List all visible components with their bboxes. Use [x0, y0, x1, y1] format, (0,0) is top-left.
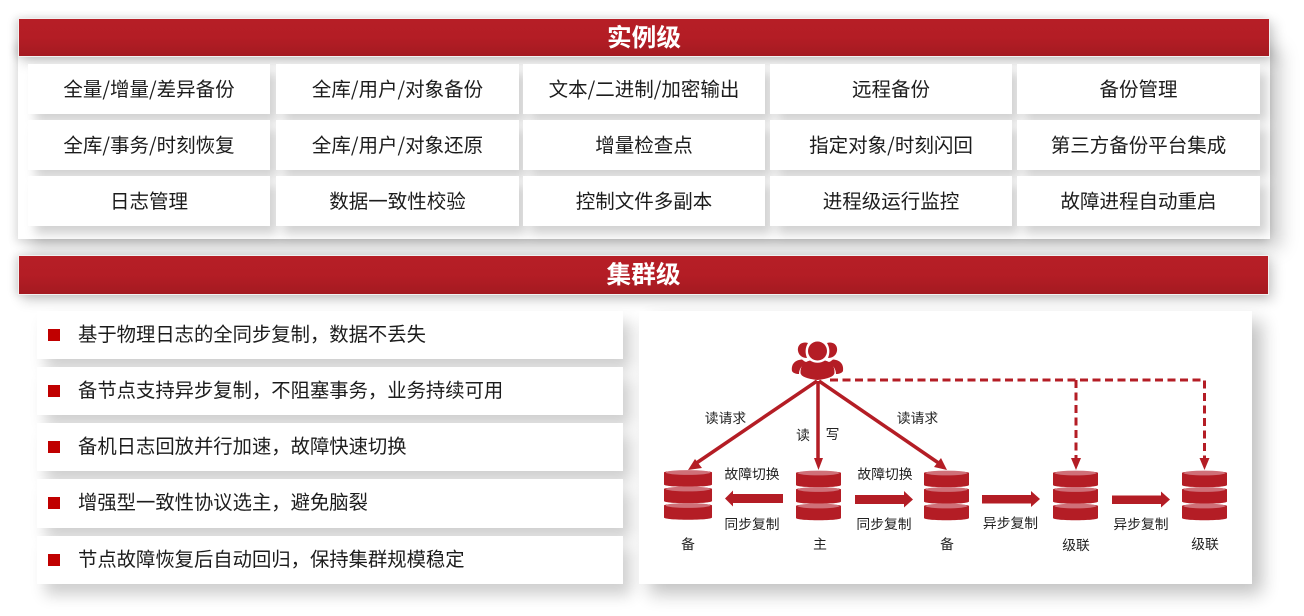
cell: 远程备份: [852, 73, 930, 102]
cell: [1017, 120, 1260, 170]
cell: [523, 64, 765, 114]
list item: 备节点支持异步复制，不阻塞事务，业务持续可用: [78, 381, 503, 402]
labels: diagram text: 读请求: [897, 411, 938, 426]
list item: [37, 367, 623, 415]
icon: users: [792, 342, 843, 380]
cell: [1017, 176, 1260, 226]
arrow: left failover: [725, 490, 783, 506]
labels: diagram text: 读请求: [705, 411, 746, 426]
list item: [37, 311, 623, 359]
icon: cascade database one: [1053, 471, 1098, 520]
cell: [523, 120, 765, 170]
cell: 备份管理: [1099, 73, 1178, 102]
cell: 全库/事务/时刻恢复: [63, 129, 235, 158]
list item: 备机日志回放并行加速，故障快速切换: [78, 437, 407, 458]
cell: [276, 64, 519, 114]
heading: cluster level: 集群级: [606, 262, 681, 289]
arrowhead: cascade one: [1071, 458, 1081, 470]
list item: [37, 423, 623, 471]
arrow: async replication one: [982, 491, 1040, 507]
cell: 进程级运行监控: [823, 185, 959, 214]
labels: diagram text: 同步复制: [856, 516, 912, 532]
heading: cluster level: [18, 255, 1269, 295]
arrow: read request to left standby: [688, 381, 817, 470]
labels: diagram text: [681, 411, 1219, 553]
arrow: dashed read to cascades: [830, 380, 1204, 460]
grid: instance level capabilities: [28, 64, 1271, 238]
cell: 指定对象/时刻闪回: [809, 129, 973, 158]
cell: [1017, 64, 1260, 114]
labels: diagram text: 主: [813, 537, 827, 552]
cell: 全库/用户/对象还原: [312, 129, 483, 158]
cell: 文本/二进制/加密输出: [549, 73, 739, 102]
heading: instance level: [18, 18, 1270, 57]
cell: 增量检查点: [595, 129, 693, 158]
labels: diagram text: 故障切换: [724, 466, 780, 482]
labels: diagram text: 备: [681, 536, 695, 552]
cell: 全量/增量/差异备份: [63, 73, 235, 102]
list item: [37, 479, 623, 528]
cell: 日志管理: [110, 185, 188, 214]
labels: diagram text: 异步复制: [983, 515, 1038, 531]
arrow: read request to right standby: [819, 381, 947, 470]
cell: 全库/用户/对象备份: [312, 73, 483, 102]
cell: [28, 120, 270, 170]
panel: instance level background: [18, 40, 1270, 239]
labels: diagram text: 级联: [1191, 537, 1219, 552]
cell: [770, 176, 1012, 226]
cell: [770, 120, 1012, 170]
labels: diagram text: 异步复制: [1113, 516, 1169, 532]
labels: diagram text: 读: [796, 428, 810, 443]
arrow: async replication two: [1112, 492, 1170, 508]
icon: cascade database two: [1182, 471, 1227, 520]
list: cluster level features: [38, 316, 638, 602]
cell: [28, 64, 270, 114]
labels: diagram text: 同步复制: [724, 516, 780, 532]
cell: 控制文件多副本: [576, 185, 712, 214]
arrowhead: cascade two: [1200, 458, 1210, 470]
icon: left standby db: [664, 470, 712, 520]
labels: diagram text: 备: [940, 536, 954, 552]
cell: 故障进程自动重启: [1060, 185, 1216, 214]
cell: [28, 176, 270, 226]
list item: 增强型一致性协议选主，避免脑裂: [78, 493, 368, 514]
cell: 第三方备份平台集成: [1051, 129, 1226, 158]
cell: [276, 120, 519, 170]
icon: right standby database: [924, 471, 969, 520]
labels: diagram text: 级联: [1062, 538, 1090, 553]
heading: instance level: 实例级: [607, 25, 681, 52]
arrow: read write to primary: [814, 381, 823, 470]
list item: 基于物理日志的全同步复制，数据不丢失: [78, 325, 426, 346]
labels: diagram text: 故障切换: [857, 466, 913, 482]
list item: 节点故障恢复后自动回归，保持集群规模稳定: [78, 550, 465, 571]
labels: diagram text: 写: [826, 427, 839, 442]
cell: [523, 176, 765, 226]
icon: primary database: [796, 471, 841, 520]
cell: 数据一致性校验: [329, 185, 466, 214]
list item: [37, 536, 623, 584]
cell: [276, 176, 519, 226]
arrow: right failover: [855, 491, 913, 508]
cell: [770, 64, 1012, 114]
